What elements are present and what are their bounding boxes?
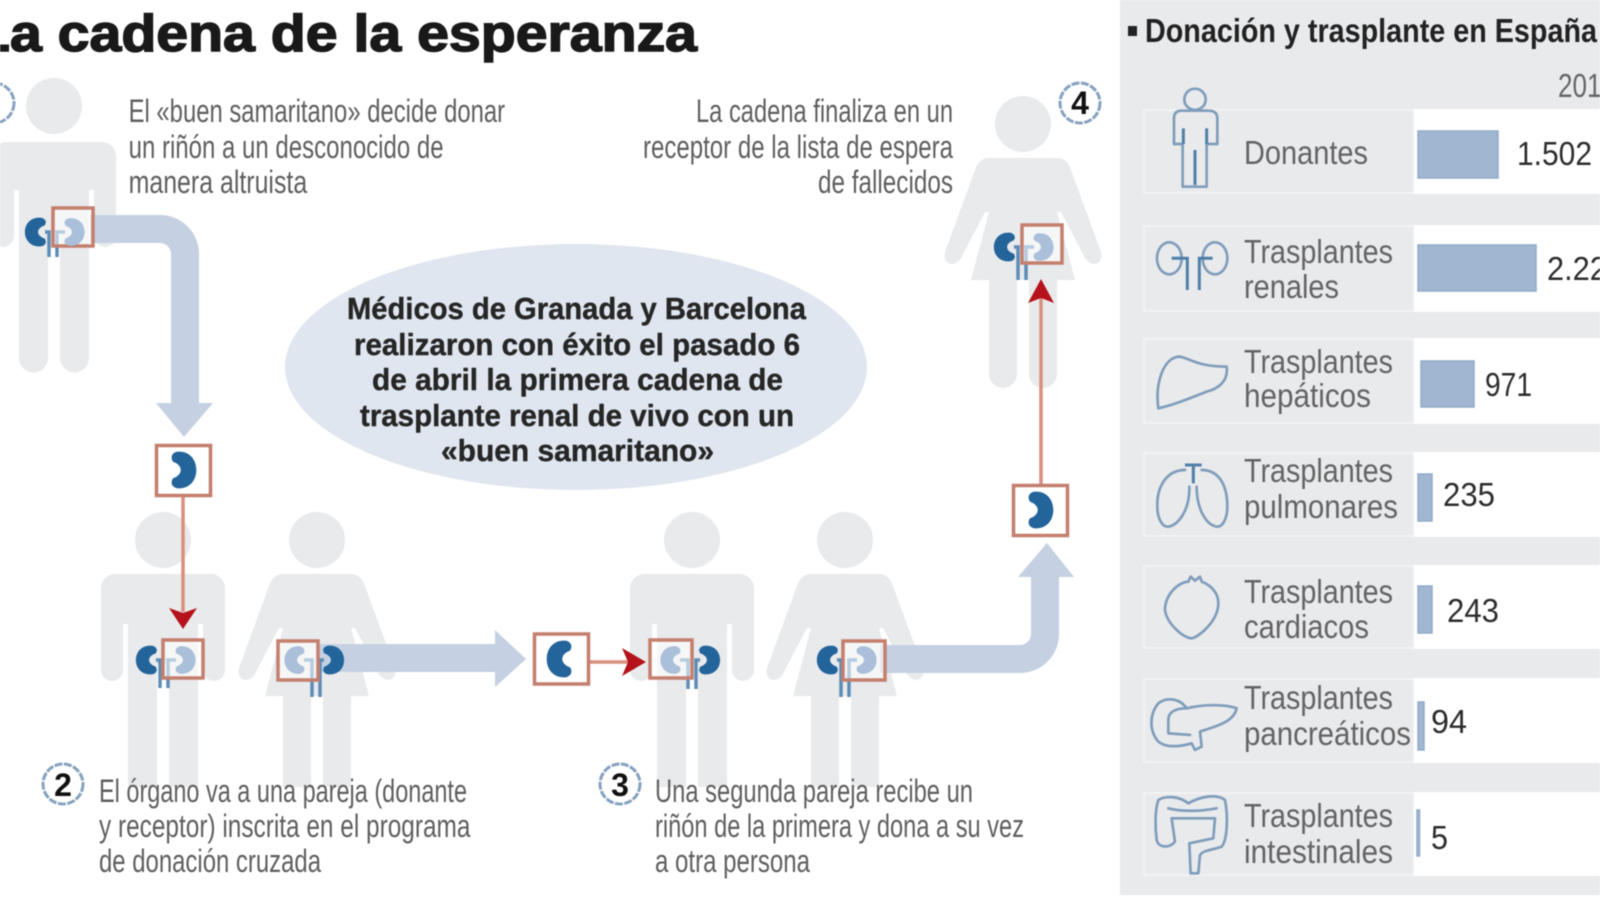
callout ellipse bbox=[285, 244, 867, 490]
icon: kidneys bbox=[1157, 242, 1227, 290]
step 1 text bbox=[129, 93, 505, 200]
step 4 text: de fallecidos bbox=[818, 164, 953, 200]
callout ellipse: de abril la primera cadena de bbox=[372, 362, 783, 397]
step 1 text: El «buen samaritano» decide donar bbox=[129, 93, 505, 129]
row: trasplantes cardiacos: 243 bbox=[1447, 592, 1499, 629]
step 3 number: 3 bbox=[611, 767, 629, 803]
red arrow: first kidney to couple one bbox=[169, 497, 197, 629]
figure: samaritan donor bbox=[0, 78, 116, 372]
row: trasplantes renales: Trasplantes bbox=[1244, 233, 1393, 270]
row: trasplantes intestinales: intestinales bbox=[1244, 833, 1393, 870]
kidneys: couple two woman bbox=[817, 641, 885, 697]
red arrow: second kidney to couple two bbox=[589, 648, 646, 676]
step 2 number bbox=[43, 764, 83, 804]
kidney box one bbox=[156, 446, 210, 496]
step 4 text bbox=[643, 93, 953, 200]
arrow: couple two to third kidney bbox=[880, 543, 1074, 659]
step 4 number bbox=[1060, 83, 1100, 123]
row: trasplantes hepaticos: hepáticos bbox=[1244, 377, 1371, 414]
figure: couple one man bbox=[101, 512, 225, 787]
row: trasplantes cardiacos bbox=[1144, 565, 1600, 649]
row: trasplantes cardiacos: cardiacos bbox=[1244, 608, 1369, 645]
icon: lungs bbox=[1157, 465, 1227, 527]
kidneys: couple one woman bbox=[278, 641, 344, 697]
callout ellipse: Médicos de Granada y Barcelona bbox=[347, 291, 807, 326]
figure: final recipient bbox=[945, 96, 1101, 388]
row: trasplantes pancreaticos: pancreáticos bbox=[1244, 715, 1411, 752]
row: trasplantes intestinales: Trasplantes bbox=[1244, 797, 1393, 834]
step 4 text: receptor de la lista de espera bbox=[643, 129, 953, 165]
kidney box two bbox=[534, 634, 588, 684]
row: trasplantes intestinales: 5 bbox=[1431, 819, 1448, 856]
row: trasplantes hepaticos: 971 bbox=[1485, 366, 1532, 403]
kidneys: final recipient bbox=[994, 225, 1062, 280]
step 4 text: La cadena finaliza en un bbox=[696, 93, 953, 129]
row: trasplantes pulmonares: pulmonares bbox=[1244, 488, 1398, 525]
step 3 number bbox=[600, 764, 640, 804]
row: trasplantes cardiacos: Trasplantes bbox=[1244, 573, 1393, 610]
kidneys: couple two man bbox=[650, 640, 720, 689]
step 2 text: y receptor) inscrita en el programa bbox=[99, 808, 471, 844]
icon: intestines bbox=[1156, 796, 1227, 873]
kidney box three bbox=[1014, 486, 1068, 536]
row: trasplantes pulmonares: 235 bbox=[1443, 476, 1495, 513]
step 2 text: El órgano va a una pareja (donante bbox=[99, 773, 467, 809]
arrow: donor to first kidney bbox=[90, 229, 213, 437]
row: donantes: 1.502 bbox=[1517, 135, 1592, 172]
step 1 text: un riñón a un desconocido de bbox=[129, 129, 444, 165]
callout ellipse: trasplante renal de vivo con un bbox=[360, 398, 794, 433]
row: trasplantes intestinales bbox=[1144, 792, 1600, 876]
row: trasplantes pulmonares: Trasplantes bbox=[1244, 452, 1393, 489]
icon: liver bbox=[1158, 357, 1227, 408]
row: trasplantes pancreaticos bbox=[1144, 678, 1600, 763]
step 3 text: a otra persona bbox=[655, 843, 810, 879]
callout ellipse: realizaron con éxito el pasado 6 bbox=[354, 327, 800, 362]
figure: couple two woman bbox=[767, 512, 923, 787]
icon: person bbox=[1174, 89, 1217, 187]
step 1 text: manera altruista bbox=[129, 164, 307, 200]
row: trasplantes pancreaticos: Trasplantes bbox=[1244, 679, 1393, 716]
step 2 text: de donación cruzada bbox=[99, 843, 321, 879]
kidneys: couple one man bbox=[136, 640, 203, 688]
figure: couple two man bbox=[630, 512, 754, 787]
red arrow: third kidney to recipient bbox=[1028, 279, 1054, 485]
step 4 number: 4 bbox=[1071, 85, 1089, 121]
icon: pancreas bbox=[1151, 699, 1237, 750]
row: donantes: Donantes bbox=[1244, 134, 1368, 171]
row: trasplantes renales bbox=[1144, 225, 1600, 312]
row: donantes bbox=[1144, 89, 1600, 194]
step 2 number: 2 bbox=[54, 767, 72, 803]
step 3 text bbox=[655, 773, 1024, 879]
row: trasplantes renales: renales bbox=[1244, 268, 1339, 305]
panel: donation and transplant in Spain bbox=[1120, 0, 1600, 895]
arrow: couple one to second kidney bbox=[318, 630, 526, 687]
step 3 text: riñón de la primera y dona a su vez bbox=[655, 808, 1024, 844]
kidneys: samaritan donor bbox=[25, 208, 93, 257]
step 1 number bbox=[0, 83, 14, 123]
step 3 text: Una segunda pareja recibe un bbox=[655, 773, 973, 809]
step 2 text bbox=[99, 773, 471, 879]
icon: heart bbox=[1165, 577, 1218, 638]
figure: couple one woman bbox=[239, 512, 395, 787]
row: trasplantes hepaticos bbox=[1144, 338, 1600, 424]
row: trasplantes pancreaticos: 94 bbox=[1431, 703, 1467, 740]
row: trasplantes hepaticos: Trasplantes bbox=[1244, 343, 1393, 380]
row: trasplantes pulmonares bbox=[1144, 452, 1600, 537]
callout ellipse: «buen samaritano» bbox=[441, 433, 714, 468]
